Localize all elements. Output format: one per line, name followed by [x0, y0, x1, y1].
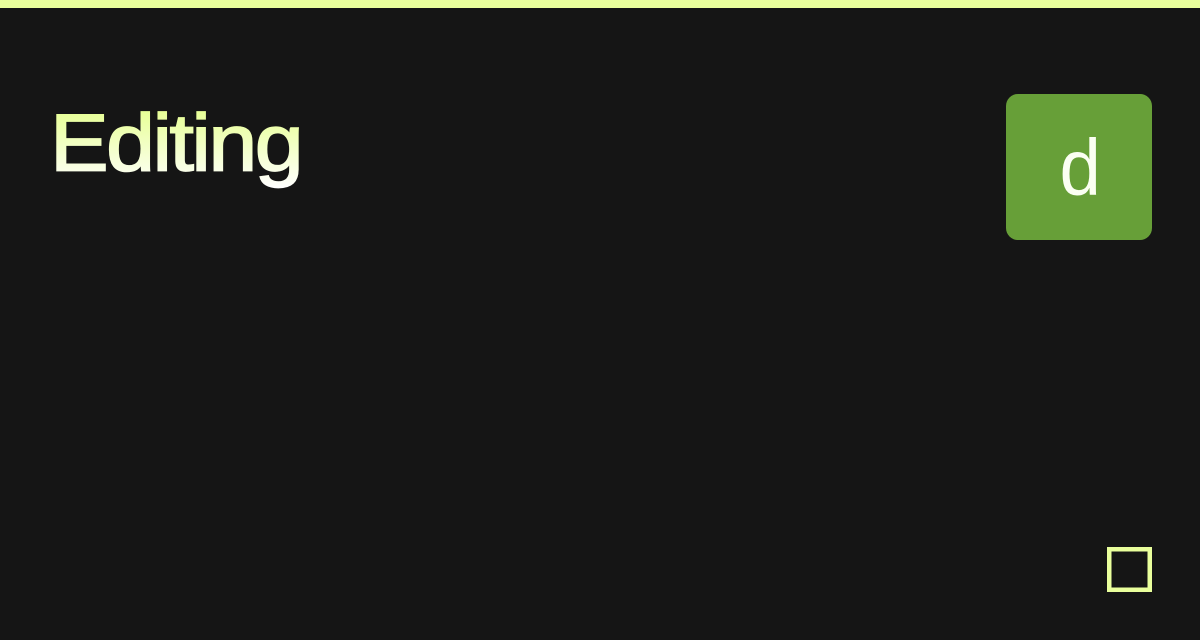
icon: outlined square — [1107, 547, 1152, 592]
icon: letter badge — [1006, 94, 1152, 240]
top accent bar — [0, 0, 1200, 8]
icon: letter badge: d — [1059, 123, 1101, 212]
title: Editing — [50, 98, 301, 188]
